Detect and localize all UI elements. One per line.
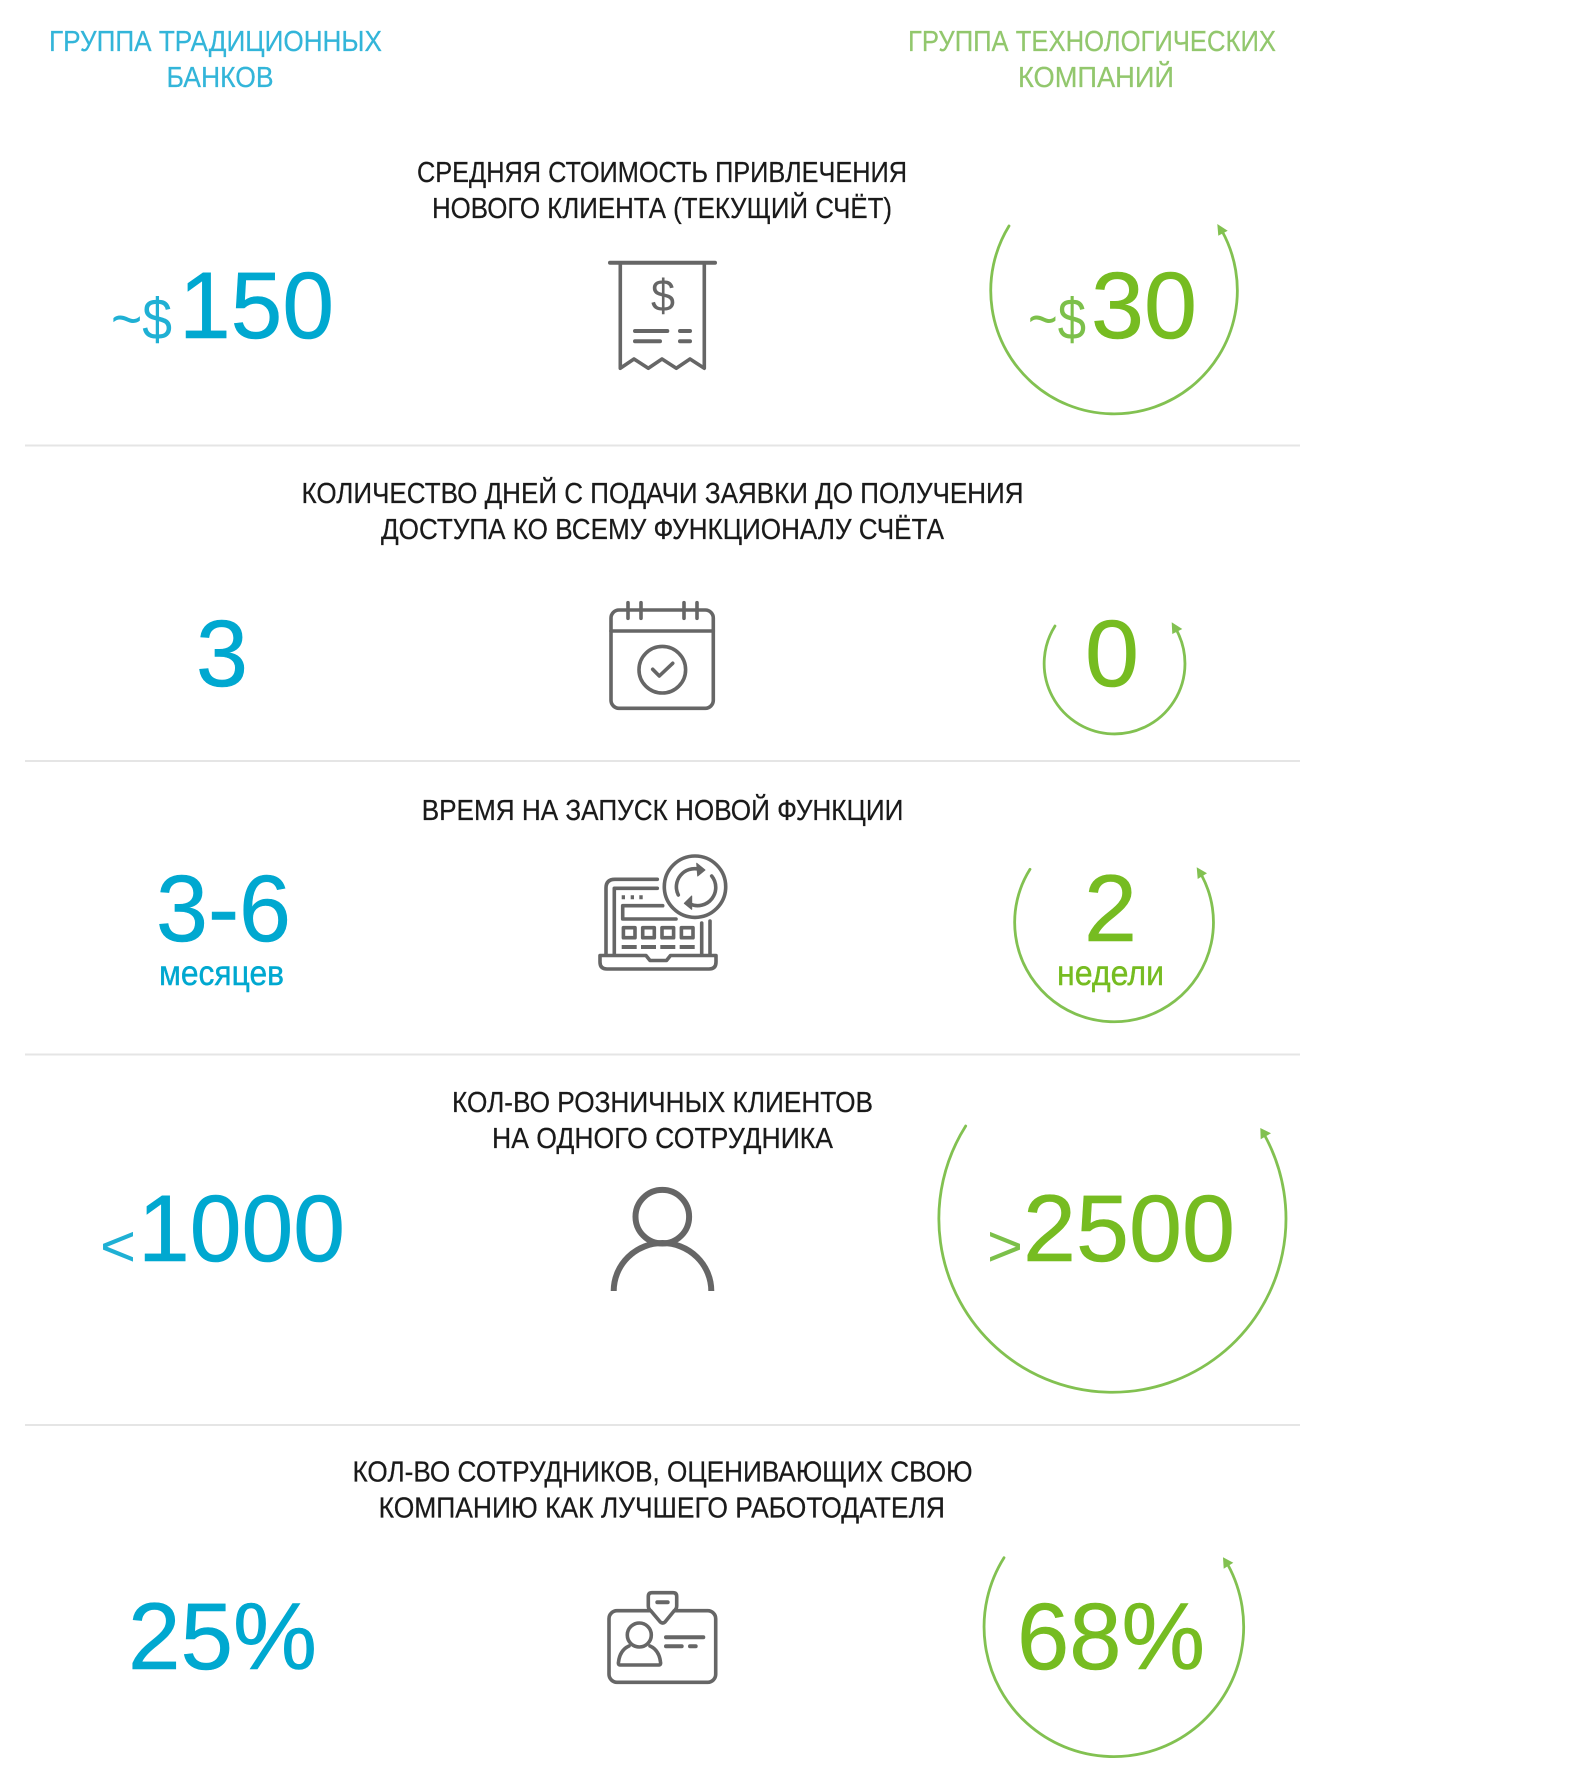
value: tech companies 68 percent with arrow circle: 68% <box>1017 1584 1205 1690</box>
title: employee rating: КОЛ-ВО СОТРУДНИКОВ, ОЦЕНИВАЮЩИХ СВОЮ <box>352 1456 972 1488</box>
value: banks less than 1000: < <box>100 1214 136 1279</box>
heading: traditional banks group: ГРУППА ТРАДИЦИОННЫХ <box>49 26 382 58</box>
value: banks about 150 dollars: 150 <box>179 253 334 359</box>
row: new feature launch time <box>156 793 1213 1022</box>
value: tech companies 2 weeks with arrow circle: 2 <box>1084 856 1137 962</box>
value: banks about 150 dollars: ~$ <box>111 287 172 352</box>
value: tech companies 2 weeks with arrow circle: недели <box>1057 954 1164 993</box>
value: tech companies 0 with arrow circle: 0 <box>1085 601 1139 707</box>
icon: receipt: $ <box>651 270 675 321</box>
title: employee rating <box>352 1456 972 1524</box>
value: banks 3-6 months: месяцев <box>159 954 284 993</box>
value: tech companies more than 2500 with arrow circle <box>939 1126 1286 1392</box>
heading: technology companies group <box>908 26 1276 94</box>
title: clients per employee <box>452 1087 873 1155</box>
title: acquisition cost: НОВОГО КЛИЕНТА (ТЕКУЩИЙ СЧЁТ) <box>432 191 892 225</box>
value: banks 3: 3 <box>196 601 248 707</box>
icon: person <box>614 1190 711 1291</box>
heading: traditional banks group: БАНКОВ <box>166 62 274 94</box>
value: tech companies about 30 dollars with arrow circle: 30 <box>1091 253 1197 359</box>
icon: calendar with check <box>611 603 713 708</box>
title: clients per employee: КОЛ-ВО РОЗНИЧНЫХ КЛИЕНТОВ <box>452 1087 873 1119</box>
title: acquisition cost: СРЕДНЯЯ СТОИМОСТЬ ПРИВЛЕЧЕНИЯ <box>417 157 907 189</box>
heading: technology companies group: КОМПАНИЙ <box>1018 60 1174 94</box>
title: days to access: ДОСТУПА КО ВСЕМУ ФУНКЦИОНАЛУ СЧЁТА <box>381 514 945 546</box>
heading: technology companies group: ГРУППА ТЕХНОЛОГИЧЕСКИХ <box>908 26 1276 58</box>
row: employees rating employer as best <box>128 1456 1244 1757</box>
value: banks 3-6 months: 3-6 <box>156 856 291 962</box>
value: tech companies 0 with arrow circle <box>1044 601 1185 734</box>
title: clients per employee: НА ОДНОГО СОТРУДНИКА <box>492 1123 834 1155</box>
value: tech companies about 30 dollars with arrow circle: ~$ <box>1028 287 1086 352</box>
icon: laptop with sync circle <box>600 856 726 969</box>
value: tech companies about 30 dollars with arrow circle <box>991 224 1237 414</box>
title: acquisition cost <box>417 157 907 225</box>
value: tech companies 2 weeks with arrow circle <box>1015 856 1213 1022</box>
row: retail clients per employee <box>100 1087 1286 1392</box>
icon: receipt <box>610 263 715 368</box>
icon: employee badge <box>609 1593 716 1682</box>
title: feature launch time: ВРЕМЯ НА ЗАПУСК НОВОЙ ФУНКЦИИ <box>422 793 903 827</box>
value: banks about 150 dollars <box>111 253 334 359</box>
row: days to full account access <box>196 476 1185 734</box>
title: days to access <box>302 476 1024 546</box>
title: days to access: КОЛИЧЕСТВО ДНЕЙ С ПОДАЧИ ЗАЯВКИ ДО ПОЛУЧЕНИЯ <box>302 476 1024 510</box>
value: tech companies more than 2500 with arrow circle: 2500 <box>1023 1176 1235 1282</box>
value: tech companies more than 2500 with arrow circle: > <box>987 1214 1023 1279</box>
value: banks less than 1000: 1000 <box>138 1176 345 1282</box>
value: tech companies 68 percent with arrow circle <box>984 1557 1244 1757</box>
heading: traditional banks group <box>49 26 382 94</box>
title: employee rating: КОМПАНИЮ КАК ЛУЧШЕГО РАБОТОДАТЕЛЯ <box>379 1492 945 1524</box>
value: banks 25 percent: 25% <box>128 1584 317 1690</box>
row: customer acquisition cost <box>111 157 1237 414</box>
